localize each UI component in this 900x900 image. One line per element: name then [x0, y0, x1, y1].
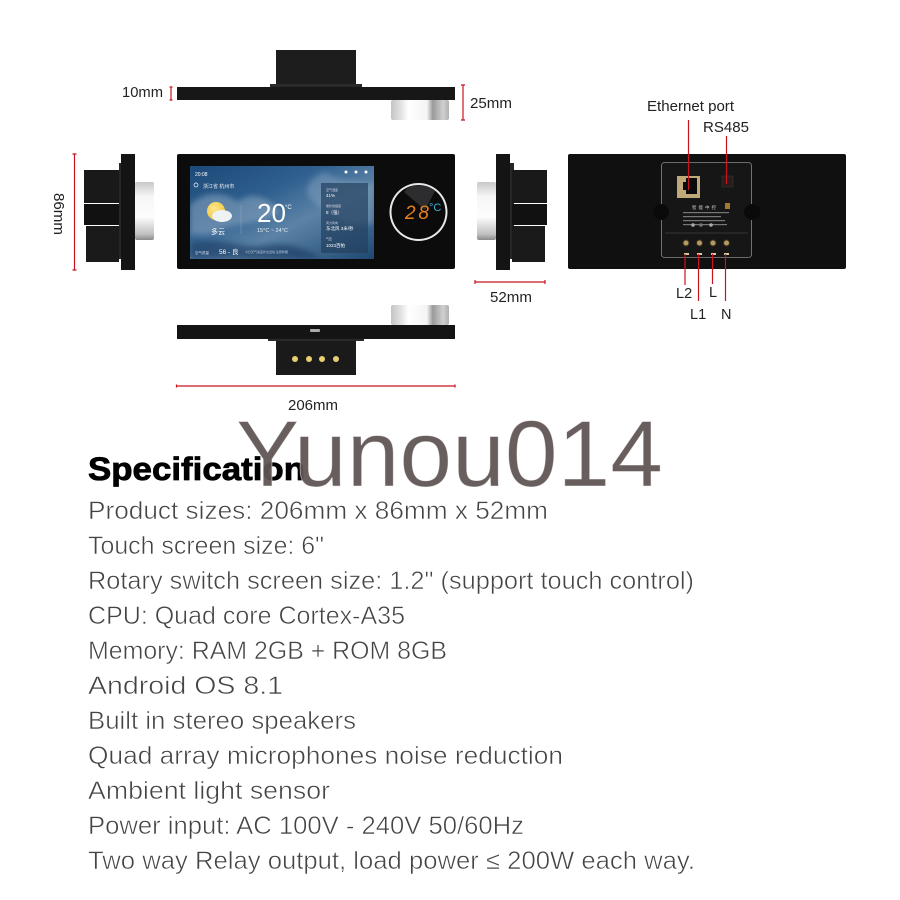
touch screen weather display: 多云	[211, 227, 225, 236]
callout: Ethernet port	[647, 99, 734, 190]
specification list: Quad array microphones noise reduction	[88, 742, 563, 770]
touch screen weather display: 紫外线强度	[326, 203, 341, 208]
dimension: 206mm	[176, 384, 455, 414]
touch screen weather display: 20	[257, 198, 286, 228]
touch screen weather display	[190, 166, 374, 259]
callout: L: L	[709, 285, 717, 301]
touch screen weather display: 41%	[326, 193, 335, 198]
terminal screws	[683, 240, 730, 246]
ethernet port	[677, 176, 700, 198]
callout: RS485	[703, 120, 749, 184]
touch screen weather display: 今日天气适宜外出活动,注意防晒	[245, 249, 288, 254]
touch screen weather display: 空气湿度	[326, 187, 338, 192]
callout: L	[709, 254, 717, 301]
touch screen weather display: 风力风向	[326, 220, 338, 225]
left side view of device	[84, 154, 154, 270]
dimension: 10mm: 10mm	[122, 85, 163, 101]
callout: L1: L1	[690, 307, 706, 323]
callout: L2: L2	[676, 286, 692, 302]
callout: N	[721, 254, 731, 323]
specification list: Two way Relay output, load power ≤ 200W each way.	[88, 847, 695, 875]
specification list: Android OS 8.1	[88, 672, 283, 700]
touch screen weather display: 8（强）	[326, 210, 342, 216]
watermark: Yunou014: Yunou014	[236, 401, 663, 506]
touch screen weather display: 气压	[326, 236, 332, 241]
callout: N: N	[721, 307, 731, 323]
specification list: Memory: RAM 2GB + ROM 8GB	[88, 637, 447, 665]
top view of device	[177, 50, 455, 120]
specification list	[88, 497, 695, 875]
RS485 port	[722, 176, 733, 187]
dimension: 206mm: 206mm	[288, 398, 338, 414]
heading: Specification: Specification	[88, 451, 305, 487]
touch screen weather display: 浙江省 杭州市	[203, 183, 234, 190]
front view of device	[177, 154, 455, 269]
touch screen weather display: °C	[285, 205, 292, 211]
callout: L1	[690, 254, 706, 323]
specification list: Ambient light sensor	[88, 777, 330, 805]
dimension: 86mm	[50, 154, 76, 270]
touch screen weather display: 东北风 3米/秒	[326, 225, 354, 232]
touch screen weather display: 20:08	[195, 172, 208, 178]
back view of device	[568, 154, 846, 269]
rotary knob display: 28	[404, 203, 429, 224]
product label: 智能中控	[692, 204, 718, 211]
touch screen weather display: 15°C ~ 24°C	[257, 228, 288, 234]
dimension: 25mm: 25mm	[470, 96, 512, 112]
touch screen weather display: 56 - 良	[219, 247, 239, 256]
dimension: 86mm: 86mm	[50, 193, 66, 235]
callout: RS485: RS485	[703, 120, 749, 136]
specification list: Touch screen size: 6"	[88, 532, 324, 560]
dimension: 52mm	[475, 280, 545, 306]
touch screen weather display: 空气质量	[195, 250, 209, 255]
right side view of device	[477, 154, 547, 270]
callout: Ethernet port: Ethernet port	[647, 99, 734, 115]
specification list: Rotary switch screen size: 1.2" (support touch control)	[88, 567, 694, 595]
specification list: Product sizes: 206mm x 86mm x 52mm	[88, 497, 548, 525]
connector pins	[292, 356, 339, 362]
rotary knob display: °C	[429, 202, 441, 214]
dimension: 25mm	[461, 85, 512, 120]
touch screen weather display: 1023百帕	[326, 242, 346, 249]
specification list: CPU: Quad core Cortex-A35	[88, 602, 405, 630]
bottom view of device	[177, 305, 455, 375]
specification list: Power input: AC 100V - 240V 50/60Hz	[88, 812, 524, 840]
callout: L2	[676, 254, 692, 302]
dimension: 52mm: 52mm	[490, 290, 532, 306]
product label	[683, 203, 730, 227]
rotary knob display	[390, 183, 448, 241]
specification list: Built in stereo speakers	[88, 707, 356, 735]
